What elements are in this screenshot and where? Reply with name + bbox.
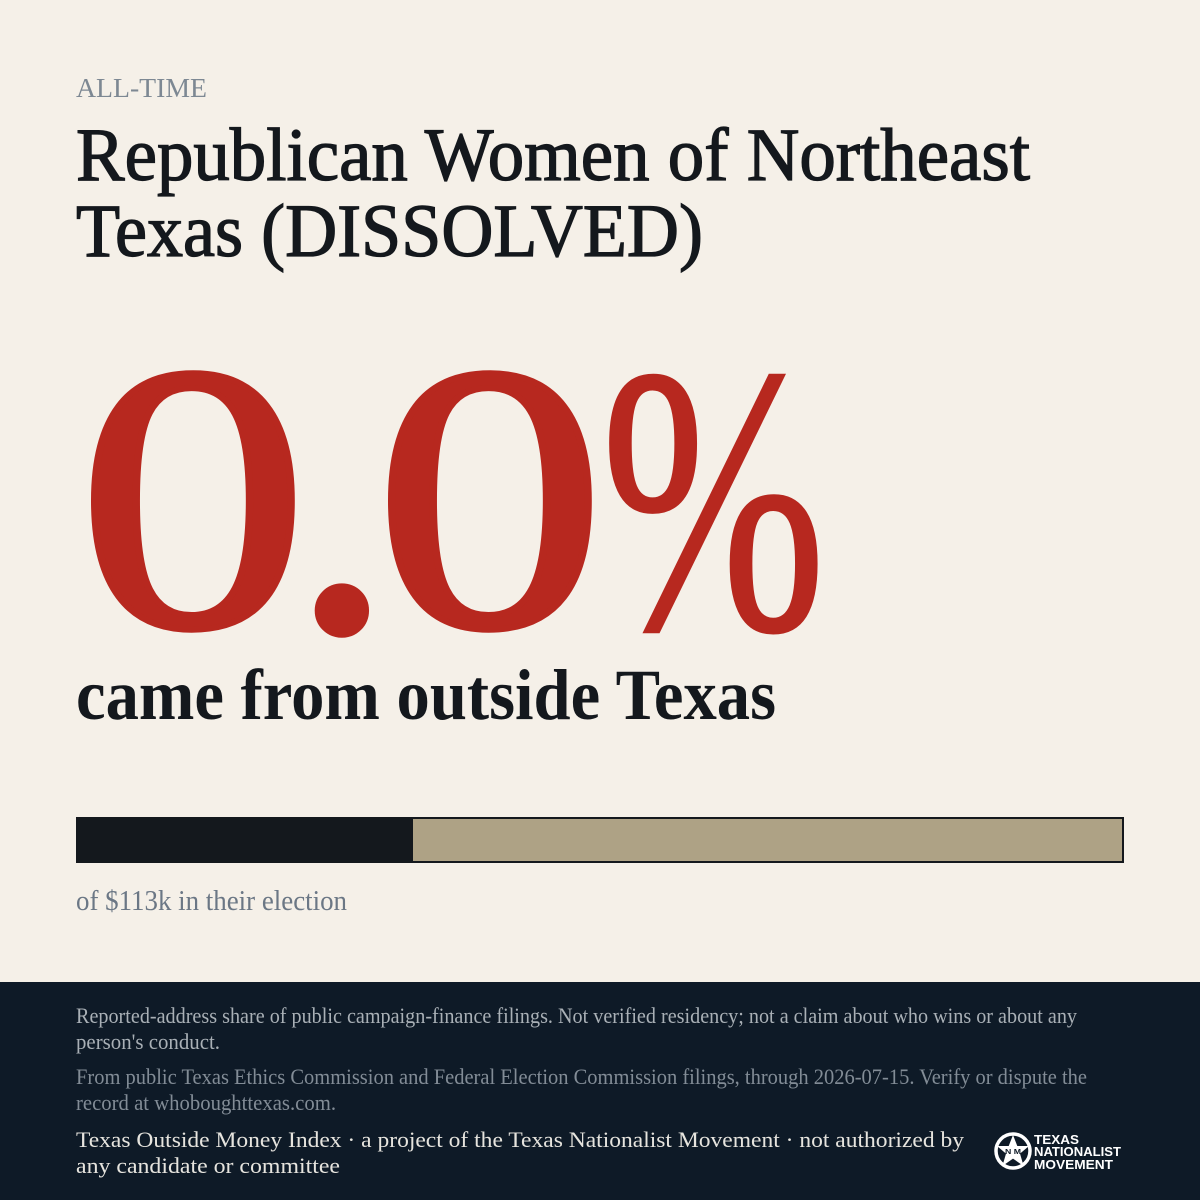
logo: Texas Nationalist Movement: MOVEMENT [1034,1158,1113,1172]
disclaimer text: person's conduct. [76,1029,220,1054]
title [76,114,1030,273]
logo: Texas Nationalist Movement: TEXAS [1034,1133,1079,1147]
source text: From public Texas Ethics Commission and Federal Election Commission filings, through 2026-07-15. Verify or dispute the [76,1064,1087,1089]
title: Republican Women of Northeast [76,114,1030,197]
source text: record at whoboughttexas.com. [76,1090,336,1115]
eyebrow label: ALL-TIME [76,73,207,103]
source text [76,1064,1087,1115]
subheading: came from outside Texas [76,655,776,735]
disclaimer text: Reported-address share of public campaign-finance filings. Not verified residency; not a claim about who wins or about any [76,1003,1077,1028]
project credit: any candidate or committee [76,1153,340,1178]
big percentage: 0 [77,287,309,708]
bar caption: of $113k in their election [76,886,347,917]
footer panel [0,982,1200,1200]
progress bar [76,817,1123,863]
disclaimer text [76,1003,1077,1054]
logo: Texas Nationalist Movement [996,1133,1121,1172]
title: Texas (DISSOLVED) [76,190,703,273]
logo: Texas Nationalist Movement: NATIONALIST [1034,1145,1121,1159]
big percentage [77,287,826,711]
big percentage: % [601,290,826,711]
project credit [76,1127,964,1178]
big percentage: 0 [374,287,606,708]
project credit: Texas Outside Money Index · a project of the Texas Nationalist Movement · not authorized by [76,1127,964,1152]
big percentage: . [300,335,384,706]
logo: Texas Nationalist Movement: N M [1005,1149,1021,1156]
